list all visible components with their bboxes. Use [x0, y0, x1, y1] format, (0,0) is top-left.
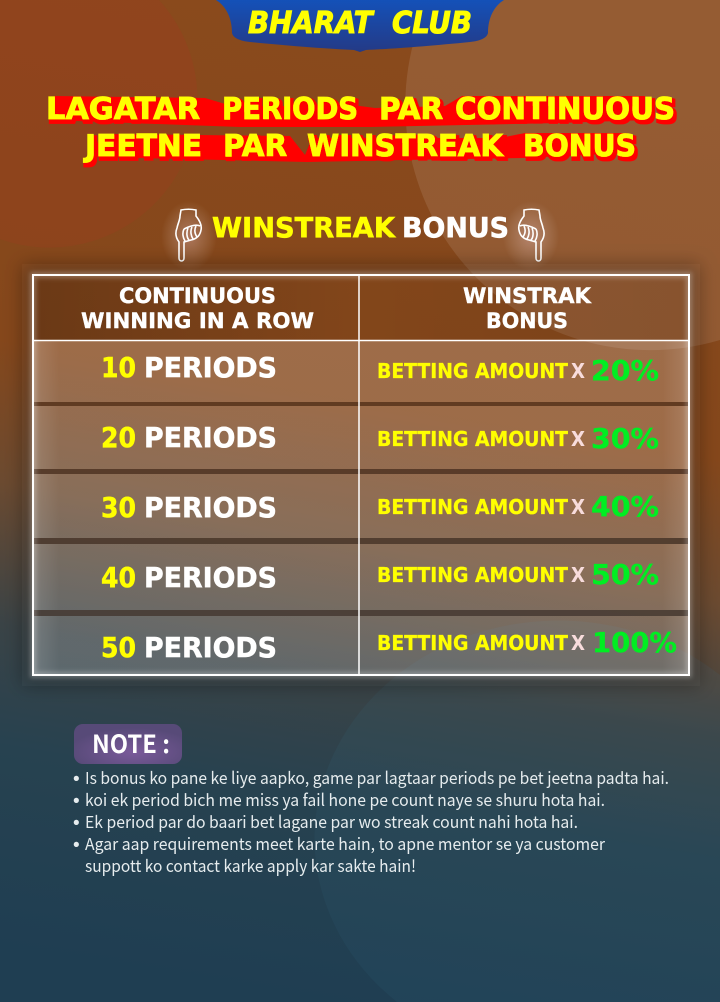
row: 30 periods: PERIODS [144, 491, 277, 524]
header: continuous winning: CONTINUOUS [119, 284, 276, 309]
row: 50 periods: BETTING AMOUNT [377, 631, 568, 655]
note text: koi ek period bich me miss ya fail hone pe count naye se shuru hota hai. [85, 787, 605, 811]
row: 10 periods [101, 351, 659, 387]
table grid [33, 275, 689, 675]
row: 30 periods: BETTING AMOUNT [377, 495, 568, 519]
title line 1: PERIODS [222, 92, 358, 127]
header: continuous winning: WINNING IN A ROW [81, 309, 314, 334]
subheading [161, 201, 559, 271]
row: 40 periods: X [571, 563, 586, 587]
title line 2: PAR [223, 129, 287, 164]
row: 10 periods: X [571, 359, 586, 383]
row: 30 periods: 40% [591, 491, 659, 523]
title [46, 92, 675, 164]
row: 20 periods: X [571, 427, 586, 451]
row: 20 periods: 20 [101, 421, 136, 454]
row: 20 periods: 30% [591, 423, 659, 455]
header: winstrak bonus: WINSTRAK [463, 284, 592, 309]
row: 20 periods: BETTING AMOUNT [377, 427, 568, 451]
table outer shadow [33, 275, 689, 675]
row: 40 periods: BETTING AMOUNT [377, 563, 568, 587]
note text: suppott ko contact karke apply kar sakte hain! [85, 853, 416, 877]
row: 40 periods [101, 559, 659, 594]
note text: Agar aap requirements meet karte hain, to apne mentor se ya customer [85, 831, 606, 855]
header: winstrak bonus [463, 284, 592, 334]
row: 50 periods: X [571, 631, 586, 655]
note text: • [73, 791, 80, 812]
subheading text: BONUS [402, 211, 509, 244]
title line 2: WINSTREAK [307, 129, 505, 164]
icon: right pointing hand [503, 201, 559, 271]
table fills [33, 275, 689, 675]
row: 50 periods: PERIODS [144, 631, 277, 664]
row: 30 periods: 30 [101, 491, 136, 524]
logo text: BHARAT CLUB [248, 6, 472, 41]
icon: left pointing hand [161, 201, 217, 271]
row: 10 periods: 10 [101, 351, 136, 384]
row: 40 periods: 50% [591, 559, 659, 591]
note text: • [73, 769, 80, 790]
bonus table [33, 275, 689, 675]
title line 2: BONUS [523, 129, 636, 164]
subheading text [212, 211, 509, 244]
row: 10 periods: PERIODS [144, 351, 277, 384]
row: 40 periods: PERIODS [144, 561, 277, 594]
note text: Is bonus ko pane ke liye aapko, game par lagtaar periods pe bet jeetna padta hai. [85, 765, 669, 789]
title line 2: JEETNE [83, 129, 202, 164]
row: 50 periods [101, 627, 677, 664]
logo banner [216, 0, 504, 52]
row: 50 periods: 50 [101, 631, 136, 664]
row: 10 periods: 20% [591, 355, 659, 387]
title line 1: LAGATAR [46, 92, 200, 127]
row: 10 periods: BETTING AMOUNT [377, 359, 568, 383]
note [73, 724, 669, 877]
header: winstrak bonus: BONUS [486, 309, 568, 334]
banner shape [216, 0, 504, 52]
row: 30 periods [101, 491, 659, 524]
title line 1: CONTINUOUS [455, 92, 675, 127]
row: 40 periods: 40 [101, 561, 136, 594]
row: 50 periods: 100% [592, 627, 677, 659]
note text [73, 765, 669, 877]
title line 2 [83, 129, 636, 164]
subheading text: WINSTREAK [212, 211, 396, 244]
note badge: NOTE : [92, 725, 170, 761]
row: 20 periods [101, 421, 659, 455]
title line 1: PAR [379, 92, 443, 127]
header: continuous winning [81, 284, 314, 334]
note text: • [73, 835, 80, 856]
title line 1 [46, 92, 675, 127]
row: 30 periods: X [571, 495, 586, 519]
row: 20 periods: PERIODS [144, 421, 277, 454]
note text: Ek period par do baari bet lagane par wo streak count nahi hota hai. [85, 809, 578, 833]
note text: • [73, 813, 80, 834]
note badge [74, 724, 182, 764]
